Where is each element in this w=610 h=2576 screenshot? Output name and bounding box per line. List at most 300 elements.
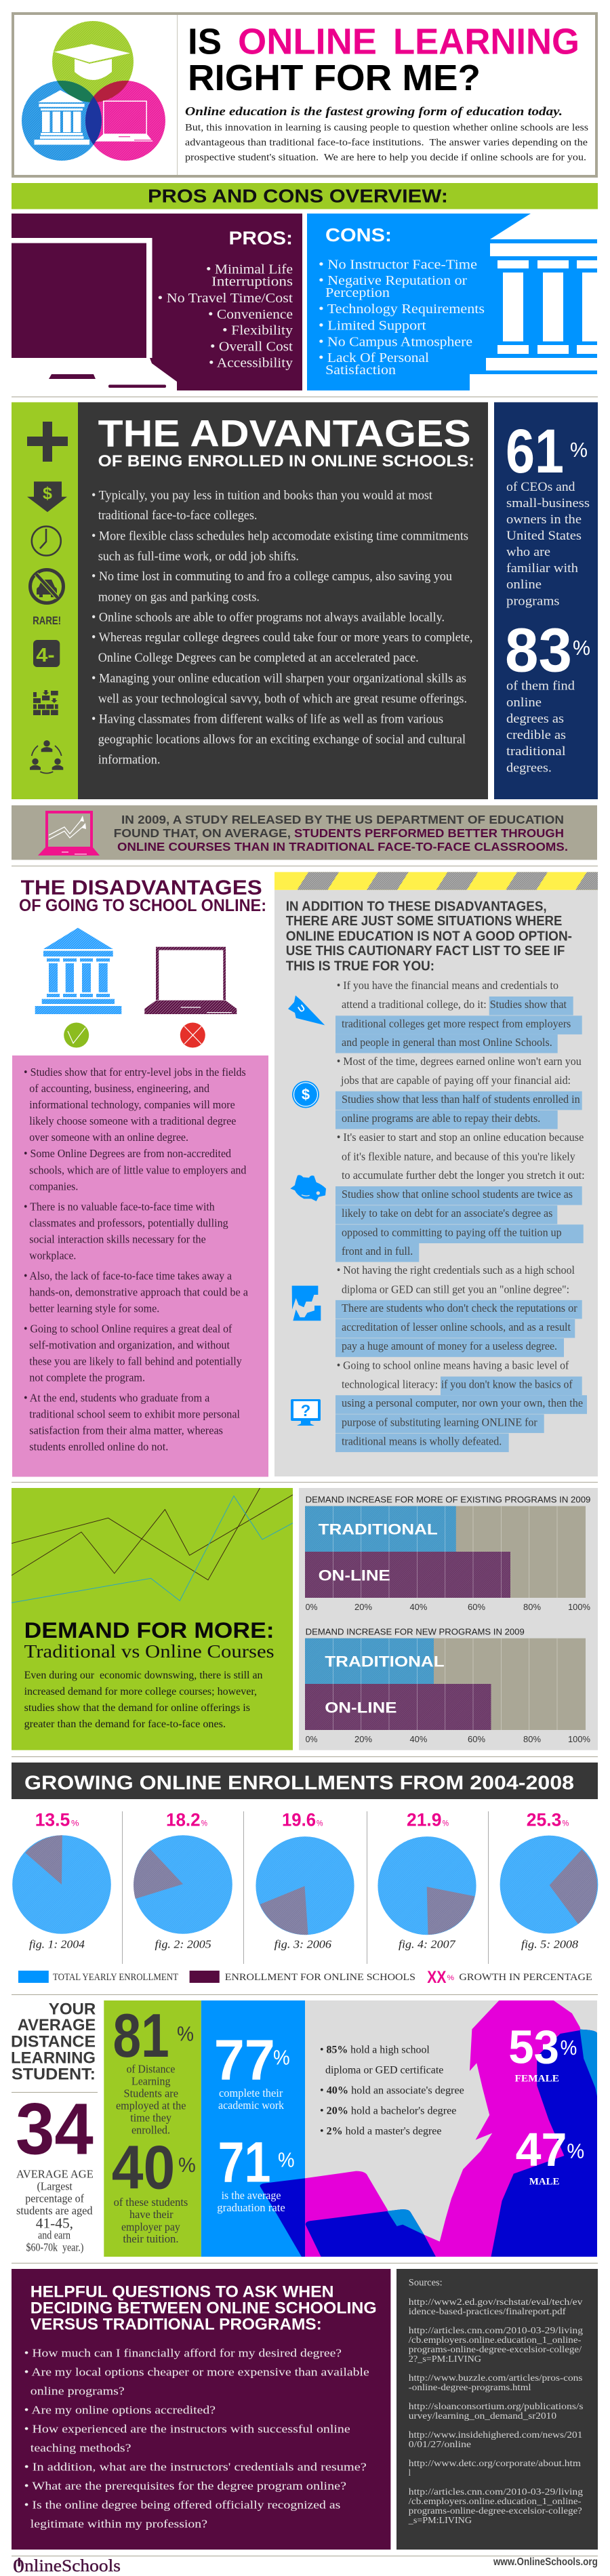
icon: monitor question: [291, 1399, 321, 1426]
caution list: • Not having the right credentials such as a high school: [337, 1264, 575, 1276]
caution list: purpose of substituting learning ONLINE for: [342, 1415, 537, 1428]
title: IS: [188, 22, 222, 62]
pie chart: 2006: %: [317, 1818, 323, 1828]
pie chart: 2004: [12, 1809, 111, 1950]
panel: sources: http://www.insidehighered.com/news/201: [409, 2430, 582, 2440]
panel: completion stats: 77: [214, 2028, 275, 2091]
disadvantages list: classmates and professors, potentially dulling: [29, 1216, 228, 1229]
disadvantages list: companies.: [29, 1180, 78, 1192]
panel: department of education study: [12, 805, 597, 860]
panel: sources: http://articles.cnn.com/2010-03-29/living: [409, 2325, 583, 2335]
questions list: • Are my online options accredited?: [24, 2404, 216, 2417]
demand body text: studies show that the demand for online offerings is: [24, 1702, 250, 1714]
panel: employment stats: [104, 2000, 201, 2257]
title: [188, 22, 580, 98]
pie chart: 2007: %: [443, 1818, 449, 1828]
pros list: [157, 262, 293, 370]
bar chart: new programs: 0%: [306, 1735, 317, 1744]
caution list: • Most of the time, degrees earned online won't earn you: [337, 1055, 582, 1068]
text: degree statistics: • 85% hold a high school: [320, 2044, 430, 2055]
cons list: Satisfaction: [325, 363, 396, 378]
caution list: if you don't know the basics of: [441, 1378, 573, 1391]
panel: employment stats: employed at the: [116, 2099, 186, 2112]
icon: monitor question: ?: [301, 1402, 310, 1420]
cons list: • Negative Reputation or: [319, 273, 467, 288]
caution list: • If you have the financial means and credentials to: [337, 979, 558, 992]
bar chart: new programs: ON-LINE: [325, 1699, 397, 1716]
disadvantages list: workplace.: [29, 1249, 76, 1262]
caution list: using a personal computer, nor own your own, then the: [342, 1396, 583, 1409]
bar chart: new programs: 80%: [523, 1735, 541, 1744]
study text: IN 2009, A STUDY RELEASED BY THE US DEPARTMENT OF EDUCATION: [121, 813, 564, 826]
cons heading: CONS:: [325, 224, 392, 245]
caution list: to accumulate further debt the longer you stretch it out:: [342, 1169, 585, 1182]
icon: laptop: [12, 238, 177, 390]
questions heading: VERSUS TRADITIONAL PROGRAMS:: [30, 2316, 322, 2334]
stat: 83 percent: 83: [505, 616, 572, 685]
caution list: and people in general than most Online Schools.: [342, 1036, 552, 1049]
text: ceos familiar: who are: [506, 545, 550, 559]
panel: completion stats: 71: [218, 2131, 271, 2194]
cons list: Perception: [325, 285, 390, 300]
icon: pennant: [288, 995, 325, 1025]
disadvantages list: informational technology, companies will more: [29, 1098, 235, 1111]
icon: bricks: [33, 690, 58, 715]
icon: traditional bank: [35, 928, 121, 1014]
bar chart: new programs: 100%: [568, 1735, 590, 1744]
pros list: • Minimal Life: [206, 262, 293, 277]
text: ceos familiar: familiar with: [506, 561, 579, 576]
panel: sources: 0/01/27/online: [409, 2439, 471, 2449]
cons list: • No Instructor Face-Time: [319, 258, 477, 273]
panel: sources: http://www2.ed.gov/rschstat/eval/tech/ev: [409, 2297, 583, 2307]
icon: dollar arrow: $: [43, 484, 52, 503]
stat: 53 percent female: 53: [508, 2020, 559, 2073]
panel: disadvantages: [12, 875, 268, 1476]
caution list: diploma or GED can still get you an "online degree":: [342, 1283, 569, 1295]
text: average age details: and earn: [38, 2229, 70, 2242]
advantages list: [92, 488, 473, 767]
disadvantages heading: [19, 875, 266, 915]
text: degrees credible: of them find: [506, 679, 575, 693]
caution list: technological literacy:: [342, 1378, 438, 1391]
bar chart: existing programs: 60%: [468, 1603, 485, 1612]
icon: plus: [27, 422, 68, 462]
caution list: traditional colleges get more respect from employers: [342, 1017, 571, 1030]
panel: sources: programs-online-degree-excelsior-college/: [409, 2344, 582, 2354]
bar chart: existing programs: [305, 1495, 590, 1612]
pie chart: 2008: [500, 1809, 598, 1950]
pros list: Interruptions: [211, 275, 293, 289]
cons list: • Lack Of Personal: [319, 350, 429, 365]
disadvantages list: these you are likely to fall behind and potentially: [29, 1354, 242, 1368]
panel: sources: /cb.employers.online.education_1_online-: [409, 2335, 582, 2345]
intro text: But, this innovation in learning is causing people to question whether online schools are less: [185, 122, 588, 133]
text: average age details: (Largest: [37, 2180, 73, 2193]
icon: four minus: [33, 640, 60, 667]
heading: your average student: [11, 2000, 96, 2083]
study text: STUDENTS PERFORMED BETTER THROUGH: [294, 826, 564, 840]
heading: your average student: STUDENT:: [12, 2065, 96, 2083]
advantages list: information.: [98, 752, 160, 767]
stat: 53 percent female: [508, 2020, 577, 2085]
disadvantages list: of accounting, business, engineering, and: [29, 1082, 209, 1095]
study text: FOUND THAT, ON AVERAGE,: [114, 826, 291, 840]
bar chart: new programs: 20%: [354, 1735, 372, 1744]
text: degrees credible: credible as: [506, 728, 566, 742]
text: degrees credible: online: [506, 696, 542, 710]
panel: employment stats: 81: [113, 2002, 169, 2070]
text: degree statistics: • 40% hold an associate's degree: [320, 2085, 464, 2096]
disadvantages list: • There is no valuable face-to-face time with: [24, 1200, 215, 1213]
bar chart: new programs: 60%: [468, 1735, 485, 1744]
panel: employment stats: have their: [129, 2208, 174, 2221]
bar chart: new programs: TRADITIONAL: [325, 1653, 445, 1670]
caution heading: [286, 899, 572, 973]
intro text: Online education is the fastest growing form of education today.: [185, 104, 563, 118]
panel: completion stats: academic work: [218, 2099, 285, 2112]
panel: completion stats: complete their: [219, 2087, 283, 2099]
panel: advantages: [12, 402, 488, 799]
questions list: [24, 2347, 369, 2531]
advantages list: Online College Degrees can be completed at an accelerated pace.: [98, 651, 419, 665]
title: RIGHT FOR ME?: [188, 58, 481, 98]
demand body text: greater than the demand for face-to-face ones.: [24, 1718, 226, 1730]
caution list: pay a huge amount of money for a useless degree.: [342, 1340, 557, 1352]
panel: sources: http://www.buzzle.com/articles/pros-cons: [409, 2373, 582, 2383]
panel: average student: [11, 2000, 597, 2257]
bar chart: existing programs: 20%: [354, 1603, 372, 1612]
pros list: • Overall Cost: [210, 339, 293, 354]
text: degree statistics: diploma or GED certificate: [325, 2064, 443, 2076]
text: average age details: AVERAGE AGE: [16, 2167, 94, 2180]
pros heading: PROS:: [229, 228, 293, 248]
panel: helpful questions: [12, 2269, 390, 2550]
stat: 47 percent male: %: [567, 2139, 584, 2162]
heading: your average student: LEARNING: [11, 2049, 96, 2067]
text highlights: [336, 997, 587, 1452]
panel: sources: 2?_s=PM:LIVING: [409, 2354, 481, 2364]
pie chart: 2005: [134, 1809, 232, 1950]
stat: 47 percent male: [516, 2123, 584, 2187]
study text: [114, 813, 568, 853]
text: average age details: 41-45,: [36, 2215, 73, 2232]
demand heading: DEMAND FOR MORE:: [24, 1618, 274, 1643]
text: average age details: percentage of: [25, 2192, 84, 2205]
caution stripe: [274, 872, 610, 890]
caution list: jobs that are capable of paying off your financial aid:: [340, 1074, 571, 1087]
stat: 53 percent female: %: [561, 2036, 577, 2059]
legend: [18, 1968, 592, 1987]
intro text: advantageous than traditional face-to-face institutions. The answer varies depending on the: [185, 138, 588, 148]
panel: employment stats: time they: [130, 2112, 172, 2125]
panel: employment stats: of Distance: [127, 2063, 175, 2076]
cons list: • No Campus Atmosphere: [319, 335, 472, 350]
advantages list: • Whereas regular college degrees could take four or more years to complete,: [92, 630, 473, 645]
text: ceos familiar: [506, 480, 590, 609]
icon: piggy bank: [290, 1175, 326, 1201]
panel: sources: l: [409, 2468, 411, 2478]
pros list: • Accessibility: [209, 355, 293, 370]
icon: dollar arrow: [27, 481, 67, 512]
pie chart: 2006: 19.6: [282, 1809, 316, 1830]
cons list: • Technology Requirements: [319, 302, 485, 317]
silhouette: students with laptops: [260, 2000, 597, 2257]
heading: your average student: AVERAGE: [18, 2016, 96, 2034]
pros list: • Convenience: [208, 307, 293, 322]
demand body text: [24, 1670, 262, 1730]
text: degree statistics: • 2% hold a master's degree: [320, 2125, 442, 2137]
advantages list: geographic locations allows for an exciting exchange of social and cultural: [98, 732, 466, 747]
caution list: [337, 979, 585, 1448]
heading: growing online enrollments: [12, 1763, 598, 1799]
questions heading: [30, 2282, 377, 2334]
cons list: • Limited Support: [319, 318, 426, 333]
panel: pros: [12, 214, 302, 390]
advantages list: such as full-time work, or odd job shifts.: [98, 549, 299, 563]
pie chart: 2007: 21.9: [407, 1809, 442, 1830]
bar chart: existing programs: 80%: [523, 1603, 541, 1612]
panel: sources: [396, 2269, 598, 2550]
heading: your average student: DISTANCE: [11, 2032, 96, 2051]
pie chart: 2005: 18.2: [166, 1809, 201, 1830]
pros list: • Flexibility: [222, 323, 293, 338]
disadvantages list: • At the end, students who graduate from a: [24, 1391, 210, 1405]
text: ceos familiar: owners in the: [506, 512, 582, 527]
pie chart: 2004: 13.5: [35, 1809, 70, 1830]
pie chart: 2008: %: [563, 1818, 569, 1828]
header panel: [13, 14, 596, 176]
text: degree statistics: [320, 2044, 464, 2137]
disadvantages list: better learning style for some.: [29, 1302, 159, 1315]
advantages list: • More flexible class schedules help accomodate existing time commitments: [92, 529, 468, 544]
pie chart: 2007: fig. 4: 2007: [399, 1937, 456, 1950]
bar chart: existing programs: 40%: [409, 1603, 427, 1612]
panel: sources: urvey/learning_on_demand_sr2010: [409, 2411, 556, 2421]
intro text: [185, 104, 588, 163]
text: degrees credible: degrees as: [506, 712, 564, 726]
caution list: Studies show that less than half of students enrolled in: [342, 1093, 580, 1106]
stat: 53 percent female: FEMALE: [515, 2074, 559, 2085]
pie chart: 2008: 25.3: [527, 1809, 561, 1830]
study text: ONLINE COURSES THAN IN TRADITIONAL FACE-TO-FACE CLASSROOMS.: [117, 840, 568, 853]
caution heading: IN ADDITION TO THESE DISADVANTAGES,: [286, 899, 547, 914]
legend: GROWTH IN PERCENTAGE: [459, 1972, 592, 1983]
stat: 47 percent male: 47: [516, 2123, 567, 2176]
advantages list: money on gas and parking costs.: [98, 590, 260, 604]
questions heading: HELPFUL QUESTIONS TO ASK WHEN: [30, 2282, 334, 2301]
panel: employment stats: enrolled.: [131, 2124, 170, 2137]
pie chart: 2006: fig. 3: 2006: [274, 1937, 332, 1950]
questions list: • Is the online degree being offered officially recognized as: [24, 2499, 340, 2512]
caution list: attend a traditional college, do it:: [342, 998, 487, 1011]
caution list: likely to take on debt for an associate's degree as: [342, 1207, 552, 1220]
questions list: • What are the prerequisites for the degree program online?: [24, 2480, 346, 2493]
panel: demand bar charts: [299, 1488, 598, 1750]
text: degrees credible: [506, 679, 575, 776]
panel: completion stats: is the average: [222, 2189, 281, 2202]
text: average age details: students are aged: [16, 2205, 93, 2217]
disadvantages list: not complete the program.: [29, 1371, 145, 1384]
icon: cross mark: [180, 1022, 205, 1048]
cons list: [319, 258, 485, 378]
advantages list: • Typically, you pay less in tuition and books than you would at most: [92, 488, 433, 502]
stat: 61 percent: 61: [506, 417, 564, 486]
questions list: • How much can I financially afford for my desired degree?: [24, 2347, 342, 2360]
pie charts: [12, 1809, 598, 1964]
advantages heading: [98, 412, 474, 470]
demand heading: Traditional vs Online Courses: [24, 1641, 274, 1662]
panel: employment stats: Learning: [131, 2075, 170, 2088]
caution list: traditional means is wholly defeated.: [342, 1434, 502, 1448]
questions list: • Are my local options cheaper or more expensive than available: [24, 2366, 369, 2379]
bar chart: new programs: [305, 1628, 590, 1744]
footer logo: nlineSchools: [24, 2557, 121, 2575]
caution list: There are students who don't check the reputations or: [342, 1302, 577, 1314]
disadvantages list: satisfaction from their alma matter, whereas: [29, 1424, 223, 1437]
caution list: • Going to school online means having a basic level of: [337, 1359, 569, 1371]
disadvantages list: • Some Online Degrees are from non-accredited: [24, 1147, 231, 1160]
panel: completion stats: %: [273, 2046, 290, 2070]
icon: laptop: [144, 947, 237, 1014]
icon: dollar coin: [292, 1081, 319, 1108]
title: ONLINE: [238, 22, 377, 62]
icon: pennant: U: [296, 1003, 307, 1014]
bar chart: new programs: 40%: [409, 1735, 427, 1744]
text: average age details: [16, 2167, 94, 2254]
pie chart: 2004: %: [71, 1818, 79, 1828]
panel: employment stats: %: [178, 2153, 196, 2177]
icon: clock: [32, 526, 61, 556]
icon: chart: [292, 1286, 321, 1321]
pie chart: 2005: %: [201, 1818, 207, 1828]
disadvantages list: social interaction skills necessary for the: [29, 1232, 206, 1245]
advantages list: • Online schools are able to offer programs not always available locally.: [92, 611, 445, 625]
caution heading: USE THIS CAUTIONARY FACT LIST TO SEE IF: [286, 944, 565, 959]
heading: pros and cons overview: [12, 183, 598, 209]
bar chart: new programs: DEMAND INCREASE FOR NEW PROGRAMS IN 2009: [306, 1628, 525, 1637]
panel: sources: /cb.employers.online.education_1_online-: [409, 2496, 582, 2506]
icon: rare label: RARE!: [33, 614, 61, 627]
disadvantages list: • Studies show that for entry-level jobs in the fields: [24, 1066, 246, 1079]
heading: pros and cons overview: PROS AND CONS OVERVIEW:: [148, 186, 448, 206]
demand body text: increased demand for more college courses; however,: [24, 1686, 257, 1697]
disadvantages list: [12, 1055, 268, 1476]
stat: 61 percent: %: [570, 438, 588, 462]
disadvantages list: likely choose someone with a traditional degree: [29, 1114, 236, 1127]
stat: average age 34: 34: [16, 2087, 94, 2169]
advantages list: well as your technological savvy, both of which are great resume offerings.: [98, 691, 467, 706]
panel: sources: http://www.detc.org/corporate/about.htm: [409, 2458, 582, 2468]
panel: employment stats: of these students: [114, 2196, 188, 2209]
icon: pink laptop with chart: [38, 812, 100, 856]
text: degrees credible: degrees.: [506, 761, 552, 776]
panel: sources: http://sloanconsortium.org/publications/s: [409, 2401, 583, 2411]
questions list: teaching methods?: [30, 2442, 131, 2455]
caution heading: THIS IS TRUE FOR YOU:: [286, 959, 434, 973]
caution list: Studies show that online school students are twice as: [342, 1188, 573, 1201]
stat: 83 percent: %: [573, 636, 590, 660]
pie chart: 2004: fig. 1: 2004: [29, 1937, 85, 1950]
bar chart: existing programs: TRADITIONAL: [319, 1521, 438, 1537]
advantages list: traditional face-to-face colleges.: [98, 508, 258, 523]
pie chart: 2007: [378, 1809, 476, 1950]
icon: dollar coin: $: [302, 1086, 310, 1103]
bar chart: existing programs: ON-LINE: [319, 1567, 390, 1584]
pie chart: 2005: fig. 2: 2005: [155, 1937, 211, 1950]
questions heading: DECIDING BETWEEN ONLINE SCHOOLING: [30, 2299, 377, 2318]
icon: bank: [470, 214, 597, 390]
pros list: • No Travel Time/Cost: [157, 291, 293, 306]
panel: cons: [307, 214, 597, 390]
advantages heading: THE ADVANTAGES: [98, 412, 471, 455]
panel: completion stats: graduation rate: [217, 2201, 285, 2214]
caution list: accreditation of lesser online schools, and as a result: [342, 1321, 571, 1333]
caution list: front and in full.: [342, 1245, 413, 1257]
text: ceos familiar: small-business: [506, 496, 590, 510]
intro text: prospective student's situation. We are here to help you decide if online schools are for you.: [185, 152, 586, 163]
legend: XX: [427, 1968, 447, 1987]
advantages list: • Having classmates from different walks of life as well as from various: [92, 712, 443, 727]
text: ceos familiar: programs: [506, 594, 560, 609]
advantages list: • Managing your online education will sharpen your organizational skills as: [92, 671, 466, 685]
panel: sources: programs-online-degree-excelsior-college?: [409, 2505, 582, 2516]
panel: completion stats: [201, 2000, 597, 2257]
panel: sources: idence-based-practices/finalreport.pdf: [409, 2306, 566, 2316]
icon: venn diagram of cap, bank and laptop: [22, 21, 165, 161]
caution list: • It's easier to start and stop an online education because: [337, 1131, 584, 1144]
questions list: legitimate within my profession?: [30, 2518, 207, 2531]
panel: ceo statistics: [494, 402, 598, 799]
panel: completion stats: %: [278, 2148, 295, 2172]
text: average age details: $60-70k year.): [26, 2241, 83, 2254]
pie chart: 2008: fig. 5: 2008: [521, 1937, 579, 1950]
panel: employment stats: 40: [112, 2133, 175, 2202]
advantages list: • No time lost in commuting to and fro a college campus, also saving you: [92, 569, 452, 584]
panel: demand for more: [12, 1488, 293, 1750]
bar chart: existing programs: 100%: [568, 1603, 590, 1612]
disadvantages list: over someone with an online degree.: [29, 1131, 188, 1144]
questions list: • How experienced are the instructors with successful online: [24, 2423, 350, 2436]
panel: sources: _s=PM:LIVING: [408, 2515, 472, 2525]
panel: employment stats: Students are: [123, 2087, 178, 2100]
icon: check mark: [64, 1022, 89, 1048]
panel: cautionary fact list: [274, 872, 610, 1476]
disadvantages list: students enrolled online do not.: [29, 1441, 168, 1453]
advantages heading: OF BEING ENROLLED IN ONLINE SCHOOLS:: [98, 452, 474, 470]
title: LEARNING: [393, 22, 580, 62]
legend: %: [447, 1974, 454, 1982]
icon: four minus: 4-: [36, 645, 55, 666]
disadvantages heading: OF GOING TO SCHOOL ONLINE:: [19, 896, 266, 915]
panel: employment stats: %: [177, 2022, 194, 2046]
questions list: online programs?: [30, 2385, 125, 2398]
legend: TOTAL YEARLY ENROLLMENT: [53, 1972, 178, 1983]
text: ceos familiar: of CEOs and: [506, 480, 575, 494]
line chart decoration: [12, 1488, 293, 1603]
panel: sources: Sources:: [409, 2278, 443, 2289]
panel: employment stats: their tuition.: [123, 2232, 179, 2245]
questions list: • In addition, what are the instructors' credentials and resume?: [24, 2461, 367, 2474]
panel: sources: http://articles.cnn.com/2010-03-29/living: [409, 2487, 583, 2497]
heading: your average student: YOUR: [49, 2000, 96, 2019]
disadvantages list: • Going to school Online requires a great deal of: [24, 1322, 232, 1335]
caution list: opposed to committing to paying off the tuition up: [342, 1226, 562, 1239]
text: degrees credible: traditional: [506, 744, 566, 759]
icon: no car: [30, 569, 64, 603]
disadvantages list: hands-on, demonstrative approach that could be a: [29, 1285, 248, 1298]
disadvantages list: • Also, the lack of face-to-face time takes away a: [24, 1269, 232, 1282]
